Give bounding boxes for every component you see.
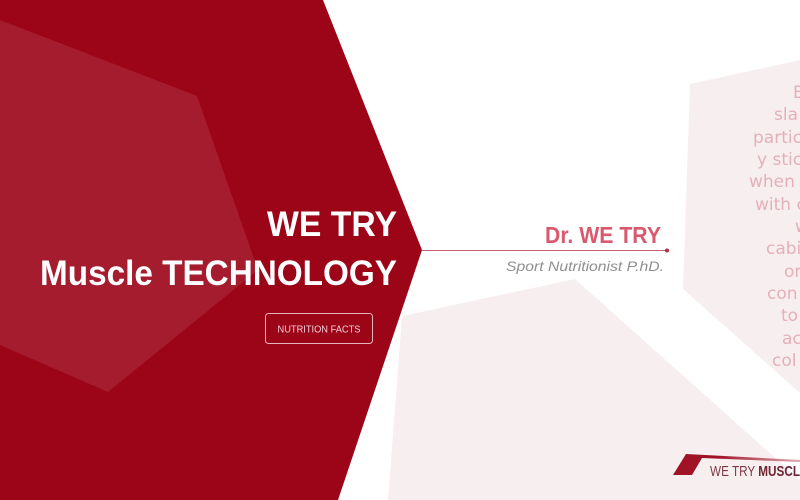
text block: clipped body copy: col <box>772 351 796 371</box>
text block: clipped body copy: to <box>781 306 798 326</box>
button: nutrition facts: NUTRITION FACTS <box>278 324 361 336</box>
heading: doctor name: Dr. WE TRY <box>545 222 661 248</box>
connector line with dot <box>422 248 669 252</box>
logo: swoosh <box>673 454 800 475</box>
panel: pale hexagon right <box>683 60 800 393</box>
button: nutrition facts <box>266 314 372 344</box>
text block: clipped body copy <box>749 83 800 371</box>
text block: clipped body copy: when <box>749 172 795 192</box>
text block: clipped body copy: sla <box>774 105 798 125</box>
text block: clipped body copy: con <box>767 284 798 304</box>
panel: lighter hexagon overlay <box>0 20 258 392</box>
title line: WE TRY: WE TRY <box>267 205 397 244</box>
panel: pale hexagon bottom <box>388 279 800 500</box>
text: doctor role: Sport Nutritionist P.hD. <box>506 258 664 274</box>
title line: Muscle TECHNOLOGY: Muscle TECHNOLOGY <box>40 254 397 293</box>
title <box>40 205 397 293</box>
panel: red hexagon <box>0 0 422 500</box>
